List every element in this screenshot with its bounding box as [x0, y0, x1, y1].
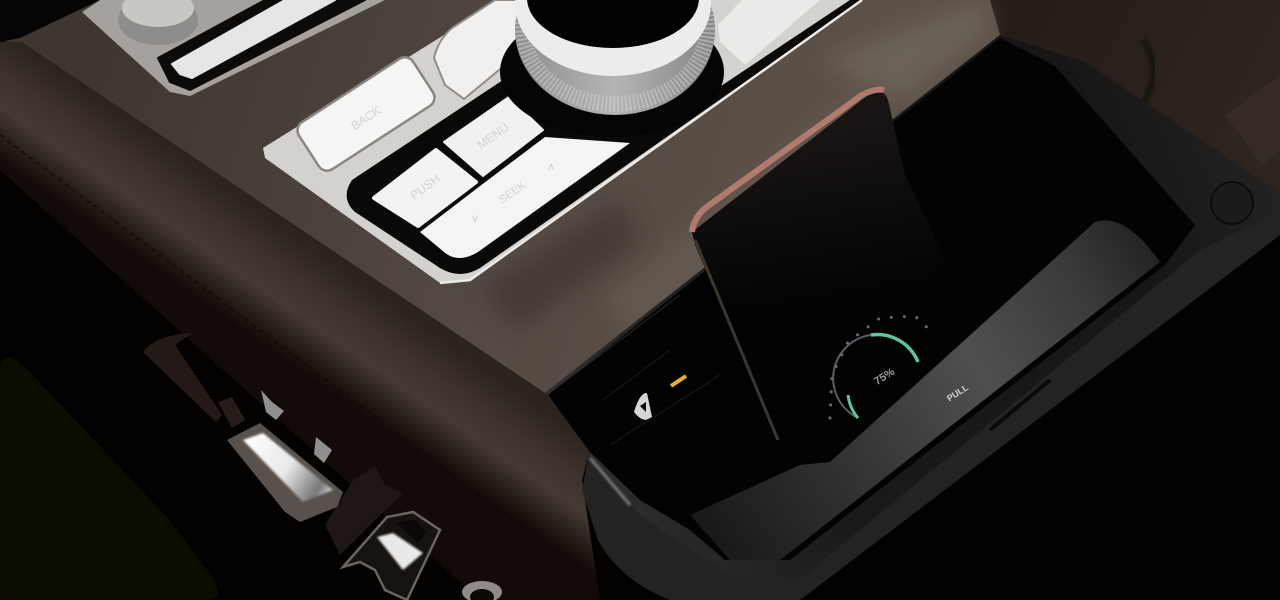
black well around buttons [347, 0, 862, 274]
SEEK rocker button [420, 137, 630, 258]
tray front lip [582, 212, 1280, 600]
top-left corner [0, 0, 100, 42]
tray corner highlight [590, 458, 630, 505]
SEEK rocker button: ∨ [471, 213, 479, 225]
icon: charging phone [634, 393, 652, 420]
upper-right key beside dial [718, 0, 820, 65]
tray gray slab [690, 220, 1160, 560]
BACK button [294, 53, 438, 175]
MENU button: MENU [475, 120, 511, 152]
phone [692, 90, 945, 455]
rotary dial [500, 0, 724, 137]
lower dial [462, 581, 502, 600]
lower-left footwell [0, 340, 230, 600]
PULL label: PULL [945, 382, 971, 403]
leather armrest [0, 42, 600, 600]
seat leather [985, 0, 1280, 195]
icon: seat back [261, 390, 284, 420]
PUSH button: PUSH [407, 172, 443, 202]
PUSH button [374, 150, 476, 226]
tray interior [548, 38, 1195, 560]
wood trim panel [0, 0, 1000, 393]
icon: seat cushion [314, 437, 332, 463]
seat adjuster: switch panel [143, 333, 502, 600]
centre silver control plate [263, 0, 860, 283]
MENU button [444, 97, 543, 176]
SEEK rocker button: SEEK [497, 179, 529, 206]
top-left silver control plate [82, 0, 385, 96]
SEEK rocker button: ∧ [547, 161, 555, 173]
gauge value: 75% [872, 366, 897, 388]
secondary seat switch [343, 512, 440, 600]
main seat switch [227, 423, 343, 522]
rose gold edge [692, 90, 884, 232]
BACK button: BACK [348, 103, 384, 133]
tray frame [545, 35, 1280, 600]
wireless charging left panel [560, 295, 720, 445]
amber indicator [671, 376, 686, 386]
silver outline [440, 0, 862, 283]
tray button [1211, 182, 1253, 224]
tray pull seam [990, 380, 1050, 430]
upper-left key beside dial [434, 0, 530, 99]
charging gauge [830, 316, 935, 418]
